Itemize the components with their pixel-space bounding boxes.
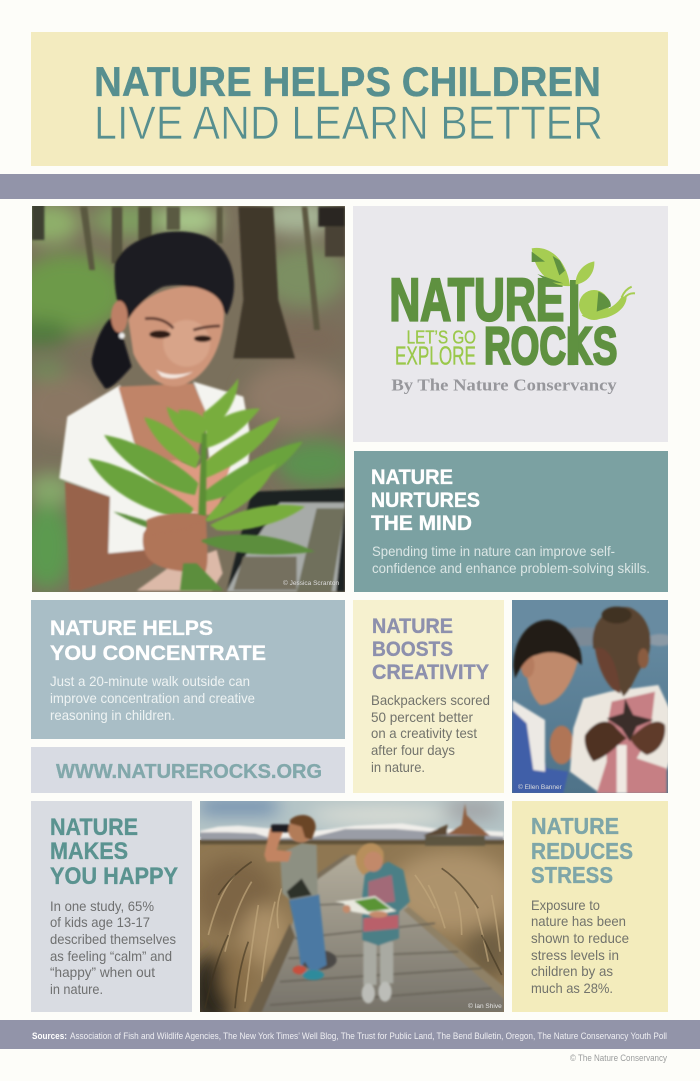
body text: described themselves (50, 931, 176, 947)
icon: snail (579, 287, 635, 320)
body text: stress levels in (531, 947, 619, 963)
photo credit: © Ellen Banner (518, 783, 563, 791)
pavilion (423, 803, 490, 846)
panel: nature makes you happy (31, 801, 192, 1012)
body text: children by as (531, 963, 613, 979)
book (227, 488, 345, 592)
logo word: Rocks: ROCKS (484, 317, 617, 376)
photo: children with starfish (510, 595, 673, 798)
body text: of kids age 13-17 (50, 914, 150, 930)
body text: “happy” when out (50, 964, 155, 980)
heading: CREATIVITY (372, 660, 489, 684)
boy's arm (264, 828, 292, 862)
body text: in nature. (50, 981, 103, 997)
photo: girl holding fern (32, 206, 345, 592)
body text: improve concentration and creative (50, 690, 255, 706)
icon: small leaf (576, 261, 594, 284)
grass blades (208, 875, 500, 1002)
heading: NATURE (371, 466, 453, 489)
panel: nature nurtures the mind (354, 451, 668, 592)
heading: STRESS (531, 862, 613, 888)
boy's jacket (512, 707, 568, 793)
heading (372, 614, 489, 684)
heading: REDUCES (531, 838, 633, 864)
logo: Nature Rocks (389, 248, 635, 395)
mountains (200, 822, 504, 838)
title banner (31, 32, 668, 166)
body text (50, 673, 255, 723)
body text: on a creativity test (371, 725, 477, 741)
face (128, 287, 224, 386)
hair back (92, 316, 132, 389)
girl's hair (593, 607, 650, 697)
body text: Backpackers scored (371, 692, 490, 708)
boy's shirt (280, 843, 318, 900)
body text: Spending time in nature can improve self- (372, 543, 615, 559)
title line 1: NATURE HELPS CHILDREN (94, 58, 601, 105)
heading: NATURE (372, 614, 453, 638)
body text (372, 543, 650, 576)
boy's collar and shirt (512, 700, 545, 772)
girl's shirt (362, 862, 410, 946)
heading: YOU CONCENTRATE (50, 641, 266, 665)
sources band (0, 1020, 700, 1049)
body text (371, 692, 490, 775)
heading (50, 814, 178, 890)
photo: children on boardwalk (200, 801, 504, 1012)
body text: shown to reduce (531, 930, 629, 946)
heading: YOU HAPPY (50, 863, 178, 890)
boardwalk (248, 855, 504, 1012)
boy's head (286, 822, 310, 844)
heading: THE MIND (371, 512, 472, 535)
heading (50, 616, 266, 665)
photo credit: © Jessica Scranton (283, 579, 339, 587)
girl's top (570, 685, 669, 793)
sky (200, 800, 504, 837)
body text: Exposure to (531, 897, 600, 913)
heading: MAKES (50, 838, 128, 865)
boy's hair (513, 620, 582, 678)
boy's shadow (300, 950, 337, 970)
divider band (0, 174, 700, 199)
body text (531, 897, 629, 996)
ear (111, 301, 128, 333)
body text: nature has been (531, 913, 626, 929)
title line 2: LIVE AND LEARN BETTER (94, 96, 603, 149)
body text: In one study, 65% (50, 898, 154, 914)
url text: WWW.NATUREROCKS.ORG (56, 760, 322, 783)
sources label: Sources: (32, 1031, 67, 1042)
neck and chest (118, 383, 207, 463)
logo line: Let's go: LET’S GO (407, 327, 476, 348)
shirt print (138, 447, 230, 517)
heading: NATURE HELPS (50, 616, 213, 640)
hair top (115, 231, 234, 320)
panel: nature boosts creativity (353, 600, 504, 793)
body text: much as 28%. (531, 980, 613, 996)
heading: NURTURES (371, 489, 480, 512)
boy's jeans (289, 894, 327, 973)
girl's hands (585, 722, 627, 762)
girl's legs (363, 942, 377, 985)
panel: nature helps you concentrate (31, 600, 345, 739)
heading: NATURE (50, 814, 138, 841)
body text: confidence and enhance problem-solving skills. (372, 560, 650, 576)
fingers (145, 512, 206, 532)
arm (64, 482, 154, 592)
body text: reasoning in children. (50, 707, 175, 723)
heading (371, 466, 480, 535)
logo line: Explore: EXPLORE (395, 340, 476, 370)
body text: 50 percent better (371, 709, 473, 725)
hand (143, 513, 208, 575)
panel: logo (353, 206, 668, 442)
book in hand (335, 896, 397, 915)
boy's face (526, 652, 578, 705)
binoculars (271, 824, 292, 832)
starfish (607, 698, 653, 742)
heading: NATURE (531, 813, 619, 839)
body text (50, 898, 176, 997)
boy's shoes (293, 966, 306, 974)
panel: website (31, 747, 345, 793)
icon: large leaf (532, 248, 570, 286)
body text: in nature. (371, 759, 425, 775)
fern (88, 378, 315, 591)
logo stem (570, 280, 578, 365)
photo credit: © Ian Shive (468, 1002, 502, 1010)
copyright: © The Nature Conservancy (570, 1053, 667, 1064)
girl's hair (356, 843, 384, 875)
shirt (59, 385, 203, 553)
girl's face (595, 648, 621, 693)
logo word: Nature: NATURE (389, 267, 564, 334)
logo byline: By The Nature Conservancy (391, 376, 617, 395)
body text: Just a 20-minute walk outside can (50, 673, 250, 689)
heading: BOOSTS (372, 637, 453, 661)
body text: as feeling “calm” and (50, 948, 172, 964)
boy's fist (550, 726, 574, 764)
heading (531, 813, 633, 888)
body text: after four days (371, 742, 455, 758)
grass (200, 840, 504, 1013)
panel: nature reduces stress (512, 801, 668, 1012)
